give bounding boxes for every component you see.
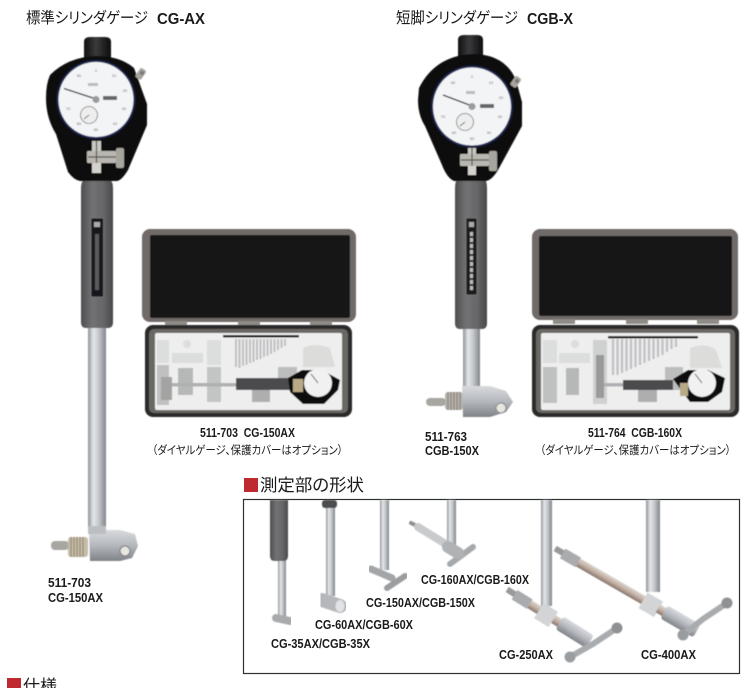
caption: 511-764 CGB-160X: 511-764 CGB-160X xyxy=(588,425,682,440)
grip xyxy=(455,180,487,329)
gauge body xyxy=(46,56,147,181)
hinges xyxy=(553,319,719,324)
grip plate xyxy=(91,218,104,297)
caption: 511-703 CG-150AX: 511-703 CG-150AX xyxy=(200,425,295,440)
caption: 511-764 CGB-160X xyxy=(540,425,731,457)
title: short-leg cylinder gauge CGB-X: CGB-X xyxy=(527,11,573,28)
dial xyxy=(431,66,513,148)
top knob xyxy=(458,35,483,56)
probe CG-160AX xyxy=(411,500,473,564)
photo: CG-150AX cylinder gauge xyxy=(46,37,147,561)
hinges xyxy=(165,321,332,325)
dial: 90 xyxy=(77,73,82,78)
spare rods xyxy=(236,339,285,368)
title: standard cylinder gauge CG-AX xyxy=(26,9,205,28)
label CG-400AX: CG-400AX xyxy=(641,648,697,662)
tray xyxy=(541,333,730,410)
dial xyxy=(56,60,136,139)
clamp xyxy=(87,141,124,173)
measuring head xyxy=(426,386,513,417)
label CG-160AX/CGB-160X: CG-160AX/CGB-160X xyxy=(421,573,530,587)
probe CG-35AX xyxy=(270,500,290,621)
tray recesses xyxy=(157,340,335,405)
case lid xyxy=(532,229,738,320)
tray recesses xyxy=(543,340,722,404)
label CG-250AX: CG-250AX xyxy=(499,648,554,662)
dial: 40 xyxy=(487,130,492,135)
dial: 60 xyxy=(77,121,82,126)
measuring head xyxy=(51,526,138,561)
probe CG-150AX xyxy=(371,500,405,588)
label CG-35AX/CGB-35X: CG-35AX/CGB-35X xyxy=(271,637,371,651)
dial: 50 xyxy=(94,127,99,132)
tube xyxy=(88,326,106,534)
dial: 30 xyxy=(122,106,127,111)
model label 511-763 CGB-150X: CGB-150X xyxy=(425,443,479,458)
model label 511-763 CGB-150X xyxy=(425,429,479,458)
title: short-leg cylinder gauge CGB-X: 短脚シリンダゲージ xyxy=(396,9,518,27)
caption: 511-764 CGB-160X: （ダイヤルゲージ、保護カバーはオプション） xyxy=(540,443,731,457)
dial: 20 xyxy=(123,88,128,93)
dial: 0 xyxy=(95,68,98,73)
heading: specifications xyxy=(7,677,57,688)
dial: 60 xyxy=(452,130,457,135)
dial: 30 xyxy=(498,114,503,119)
probe CG-250AX xyxy=(502,500,622,662)
tray xyxy=(155,333,342,410)
dial: 70 xyxy=(66,106,71,111)
photo: case for CG-150AX xyxy=(142,229,356,417)
dial: 0 xyxy=(471,74,474,79)
photo: case for CGB-160X xyxy=(532,229,739,417)
title: standard cylinder gauge CG-AX: 標準シリンダゲージ xyxy=(26,9,148,27)
caption: 511-703 CG-150AX: （ダイヤルゲージ、保護カバーはオプション） xyxy=(152,443,343,457)
model label 511-703 CG-150AX: 511-703 xyxy=(48,575,91,590)
side screw xyxy=(135,67,147,80)
caption: 511-703 CG-150AX xyxy=(152,425,343,457)
model label 511-763 CGB-150X: 511-763 xyxy=(425,429,467,444)
grip xyxy=(81,181,113,328)
probe CG-400AX xyxy=(550,500,732,640)
label CG-150AX/CGB-150X: CG-150AX/CGB-150X xyxy=(366,596,476,610)
dial: 20 xyxy=(499,95,504,100)
title: standard cylinder gauge CG-AX: CG-AX xyxy=(157,11,205,28)
dial: 10 xyxy=(112,73,117,78)
dial: 10 xyxy=(489,80,494,85)
spare rods xyxy=(613,339,676,375)
case lid xyxy=(142,229,356,322)
tube xyxy=(463,326,480,388)
case base xyxy=(532,325,739,417)
model label 511-703 CG-150AX xyxy=(48,575,103,605)
label CG-60AX/CGB-60X: CG-60AX/CGB-60X xyxy=(315,618,414,632)
dial: 90 xyxy=(451,80,456,85)
case gauge lying xyxy=(596,355,725,402)
gauge body xyxy=(418,54,522,181)
photo: CGB-150X short-leg gauge xyxy=(418,35,522,417)
grip plate xyxy=(466,218,477,295)
heading: measuring section shapes: 測定部の形状 xyxy=(260,476,364,495)
model label 511-703 CG-150AX: CG-150AX xyxy=(48,590,103,605)
dial: 70 xyxy=(441,114,446,119)
clamp xyxy=(460,148,497,175)
title: short-leg cylinder gauge CGB-X xyxy=(396,9,573,28)
top knob xyxy=(84,37,111,60)
side screw xyxy=(510,75,522,88)
case gauge lying xyxy=(161,369,340,404)
panel: measuring section shapes xyxy=(244,500,740,674)
probe CG-60AX xyxy=(322,500,344,612)
case base xyxy=(145,325,352,417)
dial: 50 xyxy=(470,136,475,141)
dial: 40 xyxy=(113,121,118,126)
